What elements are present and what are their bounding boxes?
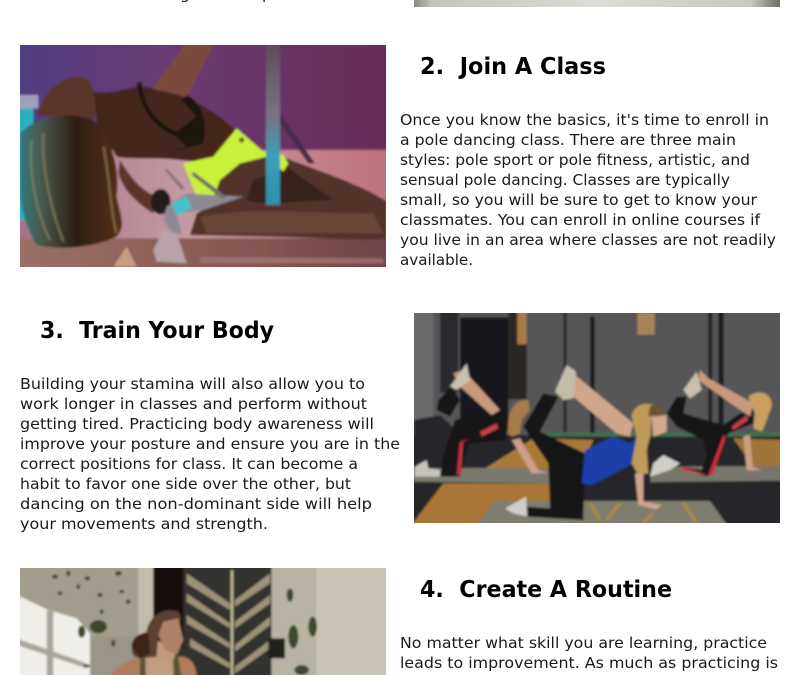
text block: step 2: Once you know the basics, it's time to enroll in [400, 111, 769, 129]
face [37, 77, 95, 122]
heading: step 2: 2. Join A Class [420, 54, 606, 80]
floor [410, 435, 783, 527]
pole [266, 42, 280, 205]
heading: step 4: 4. Create A Routine [420, 577, 672, 603]
photo: three women exercising on mats in a gym [410, 309, 783, 527]
cut-off photo from previous section [414, 0, 780, 7]
thigh and leg [190, 150, 387, 239]
text block: step 2: available. [400, 251, 473, 269]
text block: step 3: dancing on the non-dominant side will help [20, 495, 372, 513]
text block: step 2: you live in an area where classes are not readily [400, 231, 776, 249]
text block: step 3: your movements and strength. [20, 515, 268, 533]
neon bikini [183, 128, 288, 204]
text block: step 3: improve your posture and ensure you are in the [20, 435, 400, 453]
text block: step 3: habit to favor one side over the other, but [20, 475, 351, 493]
text block: step 2 [400, 111, 776, 269]
middle woman [523, 393, 585, 520]
left woman [440, 413, 507, 477]
text block: step 2: classmates. You can enroll in online courses if [400, 211, 761, 229]
text block: step 3 [20, 375, 400, 533]
text block: step 4 [400, 634, 778, 672]
text block: step 4: No matter what skill you are learning, practice [400, 634, 767, 652]
right woman [667, 397, 753, 477]
hair [20, 115, 122, 248]
text block: step 3: correct positions for class. It can become a [20, 455, 358, 473]
text block: step 2: styles: pole sport or pole fitness, artistic, and [400, 151, 750, 169]
text block: step 2: small, so you will be sure to get to know your [400, 191, 758, 209]
mats [410, 468, 550, 483]
woman [110, 657, 197, 675]
text block: step 2: a pole dancing class. There are three main [400, 131, 736, 149]
arm [152, 45, 214, 100]
floor reflections [153, 230, 187, 263]
text block: step 2: sensual pole dancing. Classes are typically [400, 171, 730, 189]
photo: pole dancer arched back on floor [17, 42, 390, 272]
text block: step 3: work longer in classes and perform without [20, 395, 367, 413]
torso [93, 87, 248, 163]
high-heeled shoe [163, 193, 243, 235]
text block: step 4: leads to improvement. As much as practicing is [400, 654, 778, 672]
ivy [52, 570, 317, 675]
text block: step 3: getting tired. Practicing body awareness will [20, 415, 374, 433]
photo: woman with ponytail in a sunlit plant-filled studio [17, 565, 390, 675]
text block: step 3: Building your stamina will also allow you to [20, 375, 365, 393]
supporting arm [118, 160, 157, 213]
cut-off text fragment from previous section [180, 0, 272, 3]
heading: step 3: 3. Train Your Body [40, 318, 274, 344]
